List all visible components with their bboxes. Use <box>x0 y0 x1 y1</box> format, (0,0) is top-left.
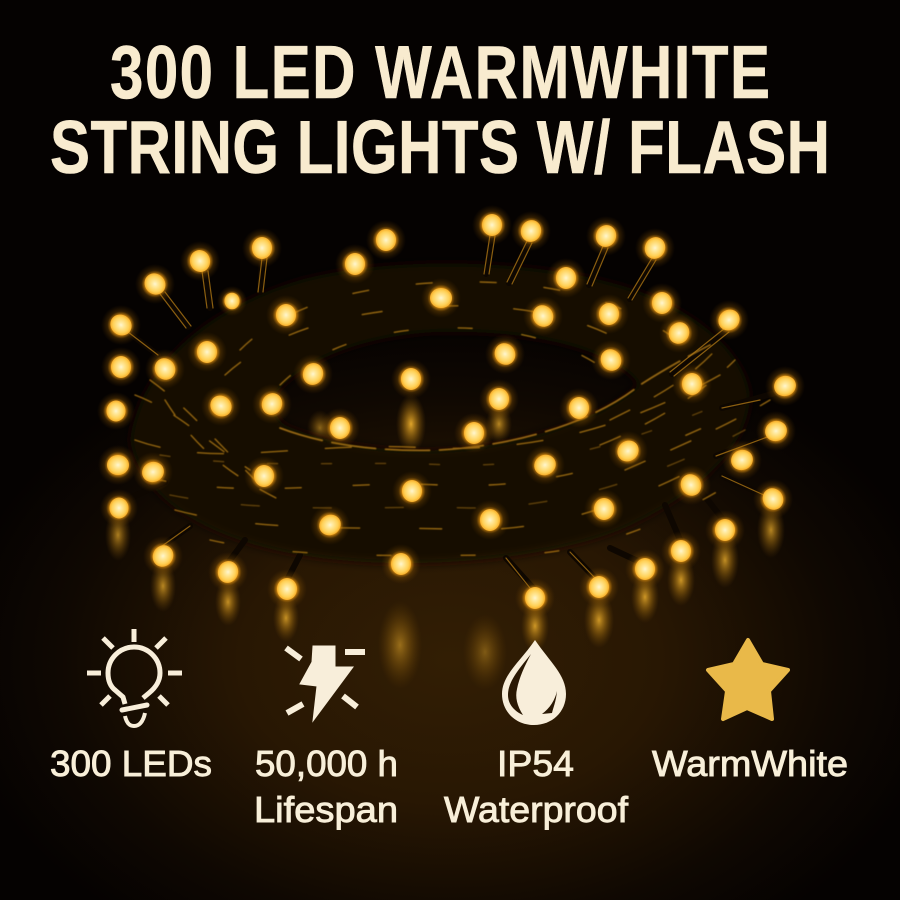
feature: WarmWhite <box>652 640 848 784</box>
icon: star <box>708 640 788 719</box>
title <box>50 32 830 190</box>
label: 300 LEDs <box>50 743 212 784</box>
feature: IP54 waterproof <box>444 640 629 830</box>
icon: lightning bolt <box>286 646 365 721</box>
bulb stems <box>126 235 779 590</box>
icon: light bulb <box>87 629 182 726</box>
wire coil <box>126 235 779 590</box>
LED bulbs <box>93 205 811 618</box>
floor reflections of the lights <box>105 394 785 690</box>
label: IP54 <box>497 743 574 784</box>
label: Lifespan <box>254 789 398 830</box>
title: 300 LED WARMWHITE <box>110 32 770 115</box>
label: Waterproof <box>444 789 629 830</box>
label: WarmWhite <box>652 743 848 784</box>
feature: 50,000 h lifespan <box>254 646 408 830</box>
title: STRING LIGHTS W/ FLASH <box>50 107 830 190</box>
feature: 300 LEDs <box>50 629 212 784</box>
icon: water drop <box>502 640 566 725</box>
label: 50,000 h <box>255 743 398 784</box>
